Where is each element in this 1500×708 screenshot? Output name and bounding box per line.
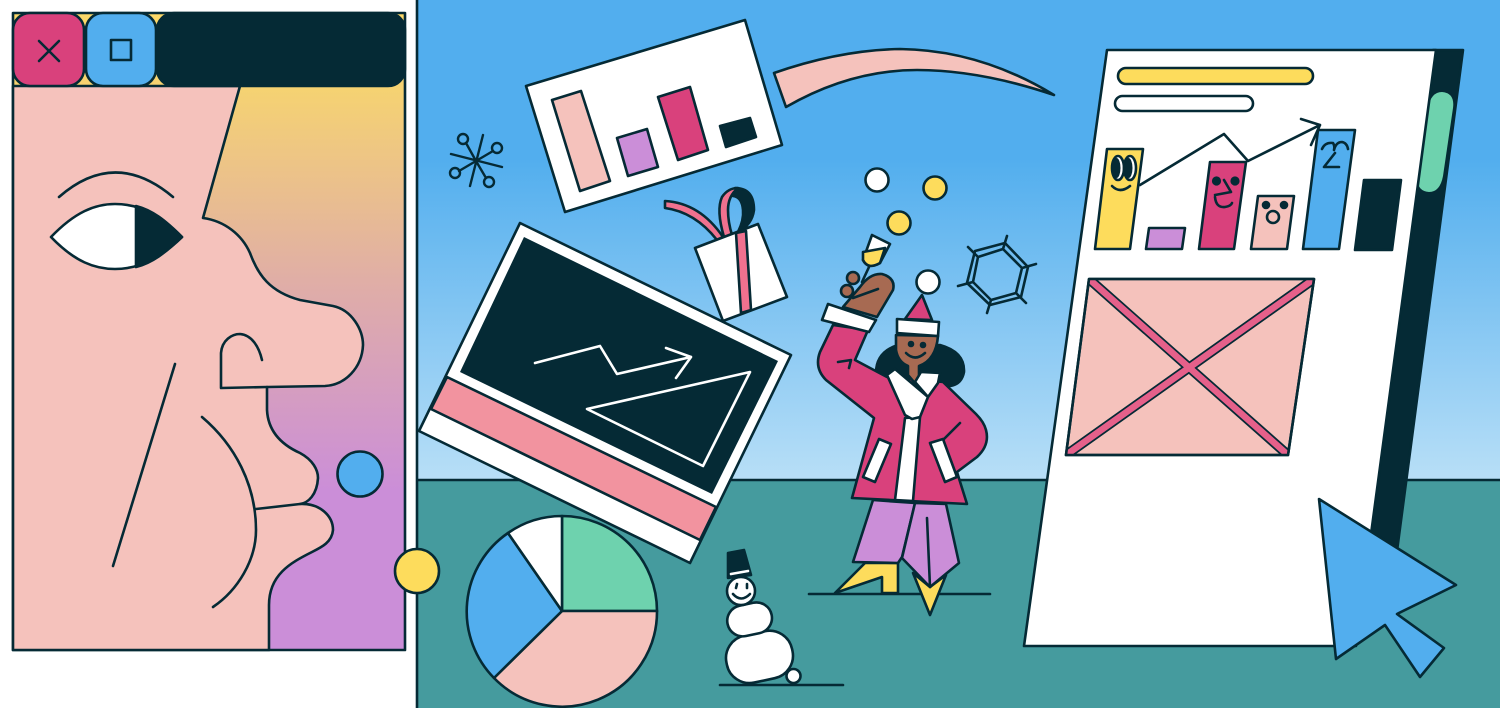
- photo card with dark chart: [419, 223, 791, 563]
- blue bar with face: [1303, 130, 1355, 249]
- pie chart: [467, 516, 657, 707]
- icon: hexagonal snowflake: [958, 236, 1036, 313]
- heading bars: [1115, 68, 1313, 111]
- icon: gift box: [665, 188, 787, 321]
- face profile: [13, 86, 363, 650]
- pink swoosh: [774, 49, 1054, 107]
- cuff: [822, 304, 876, 332]
- icon: close button: [13, 13, 84, 86]
- magenta bar with face: [1199, 162, 1246, 249]
- yellow connector dot: [395, 549, 439, 593]
- window title bar: [157, 13, 405, 86]
- short purple bar: [1146, 228, 1185, 249]
- panel: report page: [1024, 50, 1463, 646]
- eye: [51, 204, 182, 269]
- nostril: [221, 334, 267, 388]
- dark bar: [1355, 180, 1401, 250]
- cheek line: [113, 364, 175, 566]
- boots: [835, 563, 898, 593]
- chin line: [202, 417, 256, 607]
- bar chart card: [526, 20, 782, 212]
- icon: maximise button: [86, 13, 156, 86]
- pink bar with surprised face: [1251, 196, 1294, 249]
- hand: [841, 272, 894, 317]
- panel: right scene background: [417, 0, 1500, 708]
- head: [896, 335, 938, 388]
- icon: snowflake left: [450, 134, 502, 187]
- Santa hat: [897, 270, 940, 336]
- trousers: [853, 500, 959, 587]
- hair: [876, 345, 964, 386]
- panel: left browser window: [13, 13, 405, 650]
- bar with smiling face: [1095, 149, 1143, 249]
- mouth line: [256, 504, 300, 509]
- eyebrow: [59, 172, 173, 197]
- snowman: [720, 550, 843, 687]
- coat: [818, 325, 987, 504]
- champagne glass: [862, 235, 890, 282]
- woman in Santa coat: [809, 235, 990, 615]
- icon: cursor arrow: [1319, 499, 1456, 677]
- pockets: [863, 439, 891, 482]
- arrow trend line: [1140, 119, 1320, 185]
- blue circle: [338, 452, 382, 496]
- image placeholder: [1066, 279, 1314, 455]
- gold balls: [866, 168, 946, 234]
- collar and placket: [887, 369, 940, 501]
